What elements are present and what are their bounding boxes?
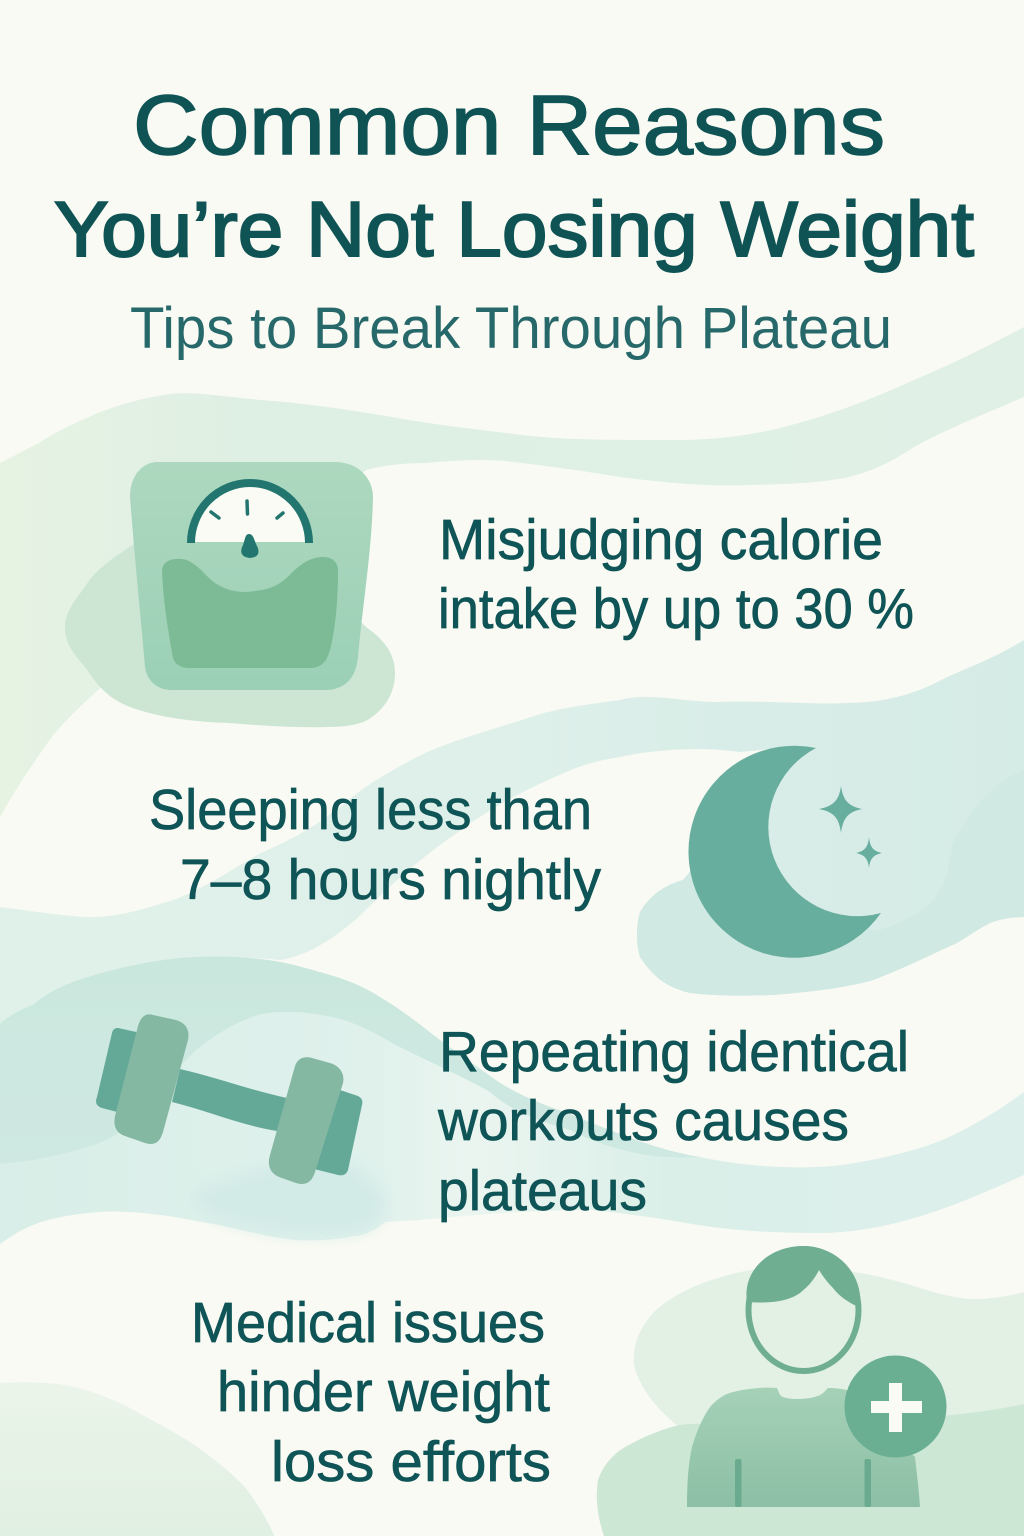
text: medical: loss efforts (271, 1430, 551, 1494)
text: workouts: Repeating identical (439, 1020, 909, 1084)
background blob behind scale (65, 540, 395, 727)
text: sleep: 7–8 hours nightly (180, 848, 601, 912)
icon: dumbbell (96, 1014, 362, 1184)
text: sleep (149, 778, 601, 912)
title line 2: You’re Not Losing Weight (54, 185, 974, 273)
text: workouts: plateaus (438, 1159, 647, 1223)
text: sleep: Sleeping less than (149, 778, 592, 842)
background blob behind moon (637, 770, 1024, 996)
background wave: person lower blob (597, 1404, 1024, 1536)
background wave: lower band (0, 956, 1024, 1244)
text: medical: Medical issues (191, 1291, 545, 1355)
icon: moon and stars (688, 746, 882, 958)
background wave: top band (0, 327, 1024, 817)
text: calorie intake: intake by up to 30 % (438, 577, 914, 641)
background wave: person upper blob (634, 1266, 1024, 1536)
text: calorie intake: Misjudging calorie (439, 508, 883, 572)
background wave: darker upper patch (0, 956, 700, 1164)
title line 1: Common Reasons (133, 78, 885, 172)
subtitle: Tips to Break Through Plateau (130, 296, 892, 361)
title (54, 78, 974, 273)
icon: person with medical plus (687, 1246, 946, 1507)
icon: bathroom scale (130, 462, 373, 690)
background wave: middle band (0, 640, 1024, 1024)
text: workouts (437, 1020, 909, 1223)
text: medical: hinder weight (217, 1360, 550, 1424)
text: workouts: workouts causes (437, 1089, 849, 1153)
background blob below dumbbell (194, 1159, 385, 1236)
text: calorie intake (438, 508, 914, 641)
background wave: bottom left blob (0, 1382, 274, 1536)
text: medical (191, 1291, 551, 1494)
